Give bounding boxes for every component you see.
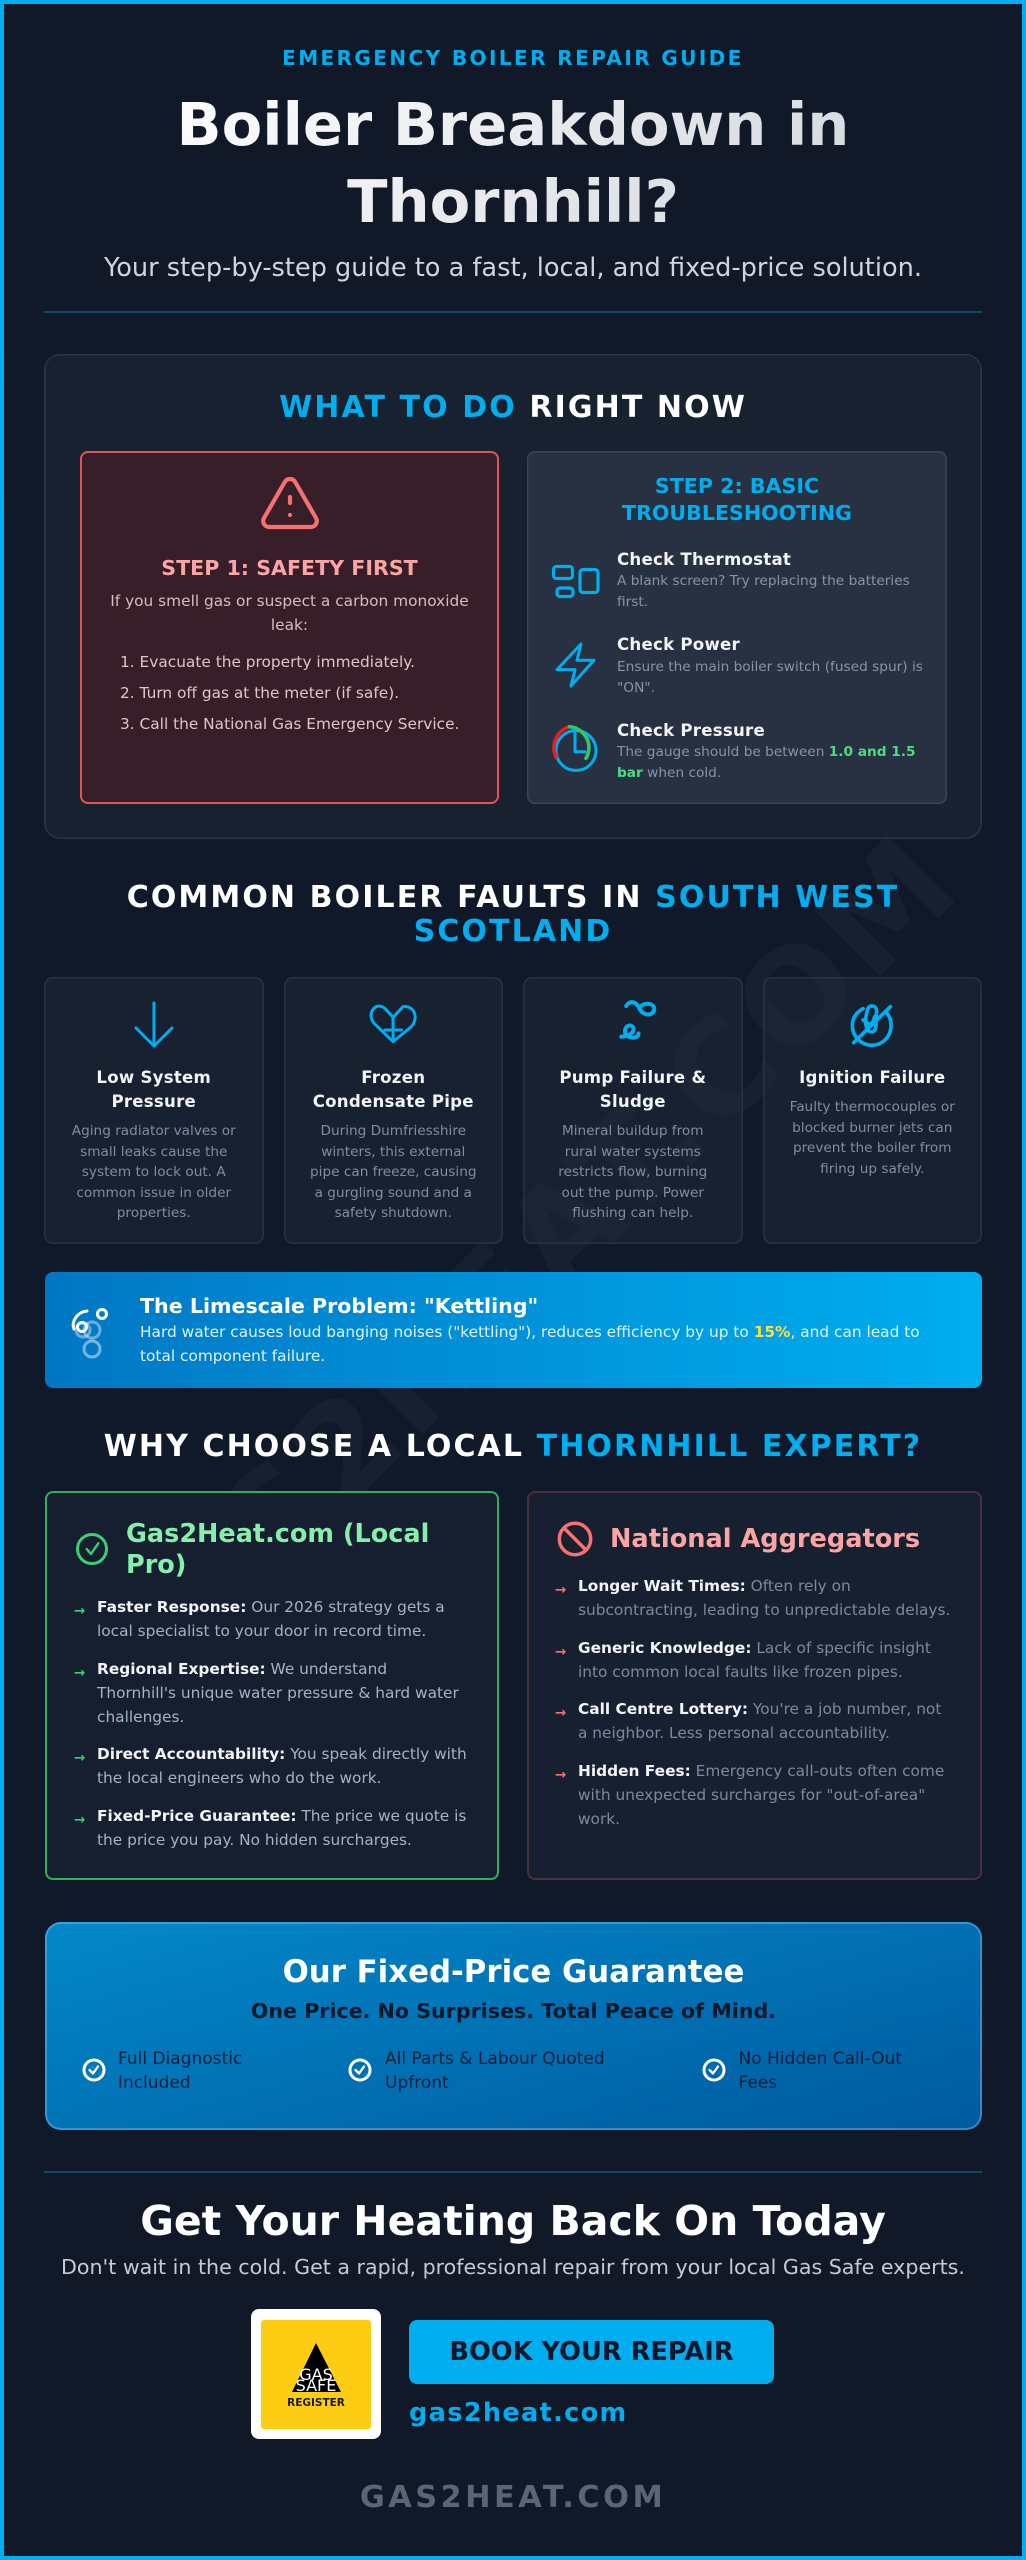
thermostat title: Check Thermostat	[617, 550, 791, 569]
step 1 intro	[110, 592, 469, 634]
badge: gas safe register	[251, 2309, 381, 2439]
step 1 intro: If you smell gas or suspect a carbon monoxide	[110, 592, 469, 610]
icon: check circle	[76, 1533, 108, 1565]
step 2 heading: TROUBLESHOOTING	[622, 501, 852, 525]
panel: gas2heat local pro	[45, 1491, 499, 1880]
power title: Check Power	[617, 635, 740, 654]
fault text: winters, this external	[321, 1144, 465, 1160]
item: parts and labour: Upfront	[385, 2072, 449, 2092]
item: fixed-price guarantee: the price you pay. No hidden surcharges.	[97, 1831, 412, 1849]
fault title	[559, 1068, 706, 1111]
icon: thermostat	[552, 564, 600, 598]
panel title: Pro)	[126, 1550, 186, 1580]
item: regional expertise: Thornhill's unique water pressure & hard water	[97, 1684, 459, 1702]
fault text	[310, 1123, 476, 1221]
item: hidden fees: work.	[578, 1810, 620, 1828]
pressure text: bar when cold.	[617, 764, 721, 780]
pressure text	[617, 744, 916, 780]
watermark: GAS2HEAT.COM	[37, 804, 989, 1756]
fault text: Aging radiator valves or	[72, 1123, 236, 1139]
item: regional expertise	[74, 1660, 459, 1726]
fault title	[313, 1068, 474, 1111]
panel: national aggregators: →	[555, 1705, 566, 1721]
fault text: properties.	[117, 1205, 191, 1221]
item: hidden fees: with unexpected surcharges for "out-of-area"	[578, 1786, 925, 1804]
panel: gas2heat local pro: →	[74, 1812, 85, 1828]
fault text: system to lock out. A	[82, 1164, 226, 1180]
item: full diagnostic: Full Diagnostic	[118, 2048, 242, 2068]
fault title: Low System	[96, 1068, 211, 1087]
icon: check 1	[81, 2057, 107, 2083]
pressure title: Check Pressure	[617, 721, 765, 740]
fault title: Pressure	[111, 1092, 196, 1111]
fault text	[72, 1123, 236, 1221]
fault text: small leaks cause the	[80, 1144, 227, 1160]
website link: gas2heat.com	[409, 2398, 627, 2428]
power text	[617, 659, 923, 696]
item: fixed-price guarantee	[74, 1807, 466, 1849]
title: Boiler Breakdown in	[177, 90, 849, 159]
fault text: During Dumfriesshire	[320, 1123, 466, 1139]
item: longer wait times: subcontracting, leading to unpredictable delays.	[578, 1601, 950, 1619]
banner text: total component failure.	[140, 1347, 325, 1365]
panel title: National Aggregators	[610, 1524, 920, 1554]
panel: national aggregators	[527, 1491, 982, 1880]
fault title: Pump Failure &	[559, 1068, 706, 1087]
icon: check 3	[701, 2057, 727, 2083]
cta subtitle: Don't wait in the cold. Get a rapid, professional repair from your local Gas Safe experts.	[61, 2255, 965, 2279]
button: book your repair: BOOK YOUR REPAIR	[449, 2337, 734, 2367]
icon: flame off	[850, 1004, 893, 1048]
cta heading: Get Your Heating Back On Today	[140, 2197, 886, 2245]
item: parts and labour	[385, 2046, 605, 2094]
icon: down arrow	[134, 1002, 174, 1048]
card: pump failure and sludge	[523, 977, 742, 1244]
icon: sludge squiggle	[619, 1000, 656, 1040]
fault text: pipe can freeze, causing	[310, 1164, 476, 1180]
badge: gas safe register: SAFE	[296, 2376, 336, 2395]
fault text: common issue in older	[76, 1185, 231, 1201]
icon: check 2	[347, 2057, 373, 2083]
item: no hidden fees	[738, 2046, 902, 2094]
icon: pressure gauge	[552, 724, 598, 772]
fault text: out the pump. Power	[561, 1185, 704, 1201]
step 1 list: 1. Evacuate the property immediately.	[120, 653, 415, 671]
step 1 list: 3. Call the National Gas Emergency Service.	[120, 715, 459, 733]
fault text: Faulty thermocouples or	[790, 1099, 955, 1115]
button: book your repair	[409, 2320, 774, 2384]
item: fixed-price guarantee: Fixed-Price Guarantee: The price we quote is	[97, 1807, 466, 1825]
banner: limescale problem	[45, 1272, 982, 1388]
item: call centre lottery: a neighbor. Less personal accountability.	[578, 1724, 890, 1742]
power text: "ON".	[617, 680, 655, 696]
thermostat text: A blank screen? Try replacing the batteries	[617, 573, 910, 589]
item: faster response: Faster Response: Our 2026 strategy gets a	[97, 1598, 445, 1616]
fault text: a gurgling sound and a	[315, 1185, 472, 1201]
panel: gas2heat local pro: →	[74, 1603, 85, 1619]
step 2 heading	[622, 474, 852, 525]
item: generic knowledge	[555, 1639, 931, 1681]
item: regional expertise: challenges.	[97, 1708, 184, 1726]
panel: what to do right now	[44, 354, 982, 839]
icon: limescale bubbles	[72, 1308, 108, 1358]
fault text: firing up safely.	[820, 1161, 924, 1177]
card: ignition failure	[762, 977, 982, 1244]
banner title: The Limescale Problem: "Kettling"	[140, 1294, 538, 1318]
step 1 heading: STEP 1: SAFETY FIRST	[161, 556, 418, 580]
fault title: Ignition Failure	[799, 1068, 945, 1087]
fault title: Frozen	[361, 1068, 425, 1087]
item: no hidden fees: No Hidden Call-Out	[738, 2048, 902, 2068]
step 2 heading: STEP 2: BASIC	[655, 474, 819, 498]
item: hidden fees	[555, 1762, 944, 1828]
panel: step 2 basic troubleshooting	[527, 451, 947, 804]
heading: common boiler faults: SCOTLAND	[414, 914, 612, 949]
item: call centre lottery	[555, 1700, 941, 1742]
item: faster response: local specialist to your door in record time.	[97, 1622, 426, 1640]
step 1 list	[120, 653, 459, 733]
step 1 list: 2. Turn off gas at the meter (if safe).	[120, 684, 399, 702]
subtitle: Your step-by-step guide to a fast, local, and fixed-price solution.	[104, 253, 922, 283]
item: full diagnostic	[118, 2046, 242, 2094]
banner text: Hard water causes loud banging noises ("kettling"), reduces efficiency by up to 15%, and can lead to	[140, 1323, 920, 1341]
fault text: restricts flow, burning	[558, 1164, 707, 1180]
item: call centre lottery: Call Centre Lottery: You're a job number, not	[578, 1700, 941, 1718]
guarantee title: Our Fixed-Price Guarantee	[283, 1954, 744, 1990]
check pressure	[552, 721, 916, 780]
panel: national aggregators: →	[555, 1582, 566, 1598]
thermostat text	[617, 573, 910, 610]
thermostat text: first.	[617, 594, 648, 610]
panel: national aggregators: →	[555, 1767, 566, 1783]
fault text: rural water systems	[565, 1144, 701, 1160]
item: longer wait times	[555, 1577, 950, 1619]
fault text: safety shutdown.	[335, 1205, 452, 1221]
item: faster response	[74, 1598, 445, 1640]
footer brand: GAS2HEAT.COM	[360, 2480, 666, 2515]
item: direct accountability: Direct Accountability: You speak directly with	[97, 1745, 467, 1763]
panel: gas2heat local pro: →	[74, 1665, 85, 1681]
icon: frozen heart	[370, 1004, 417, 1044]
fault text	[790, 1099, 955, 1177]
fault text	[558, 1123, 707, 1221]
pressure text: The gauge should be between 1.0 and 1.5	[617, 744, 916, 760]
step 1 intro: leak:	[271, 616, 308, 634]
heading: why choose a local thornhill expert: WHY CHOOSE A LOCAL THORNHILL EXPERT?	[104, 1429, 922, 1464]
title	[150, 86, 876, 240]
badge: gas safe register: REGISTER	[287, 2397, 345, 2409]
panel: national aggregators: →	[555, 1644, 566, 1660]
guarantee subtitle: One Price. No Surprises. Total Peace of Mind.	[251, 1999, 776, 2023]
item: longer wait times: Longer Wait Times: Often rely on	[578, 1577, 851, 1595]
item: regional expertise: Regional Expertise: We understand	[97, 1660, 387, 1678]
fault text: prevent the boiler from	[793, 1140, 952, 1156]
icon: lightning bolt	[556, 642, 596, 688]
banner text	[140, 1323, 920, 1365]
fault text: flushing can help.	[572, 1205, 693, 1221]
title: Thornhill?	[347, 167, 679, 236]
fault text: Mineral buildup from	[562, 1123, 704, 1139]
card: frozen condensate pipe	[284, 977, 503, 1244]
check power	[556, 635, 923, 696]
heading: what to do right now: WHAT TO DO RIGHT NOW	[279, 390, 747, 425]
panel title	[126, 1518, 429, 1580]
icon: warning triangle	[261, 476, 319, 530]
panel: gas2heat local pro: →	[74, 1750, 85, 1766]
fault title: Sludge	[600, 1092, 666, 1111]
panel title: Gas2Heat.com (Local	[126, 1518, 429, 1548]
item: hidden fees: Hidden Fees: Emergency call-outs often come	[578, 1762, 944, 1780]
heading: common boiler faults: COMMON BOILER FAULTS IN SOUTH WEST	[127, 880, 899, 915]
item: full diagnostic: Included	[118, 2072, 191, 2092]
fault title	[96, 1068, 211, 1111]
panel: fixed-price guarantee	[45, 1922, 982, 2130]
item: generic knowledge: into common local faults like frozen pipes.	[578, 1663, 903, 1681]
panel: step 1 safety first	[80, 451, 499, 804]
item: no hidden fees: Fees	[738, 2072, 777, 2092]
power text: Ensure the main boiler switch (fused spur) is	[617, 659, 923, 675]
item: generic knowledge: Generic Knowledge: Lack of specific insight	[578, 1639, 931, 1657]
heading: common boiler faults	[127, 880, 899, 949]
item: direct accountability: the local engineers who do the work.	[97, 1769, 382, 1787]
icon: ban	[558, 1522, 592, 1556]
item: direct accountability	[74, 1745, 467, 1787]
eyebrow: EMERGENCY BOILER REPAIR GUIDE	[282, 46, 744, 70]
badge: gas safe register: GAS	[299, 2365, 333, 2384]
fault text: blocked burner jets can	[792, 1120, 952, 1136]
item: parts and labour: All Parts & Labour Quoted	[385, 2048, 605, 2068]
check thermostat	[552, 550, 910, 610]
fault title: Condensate Pipe	[313, 1092, 474, 1111]
card: low system pressure	[44, 977, 264, 1244]
